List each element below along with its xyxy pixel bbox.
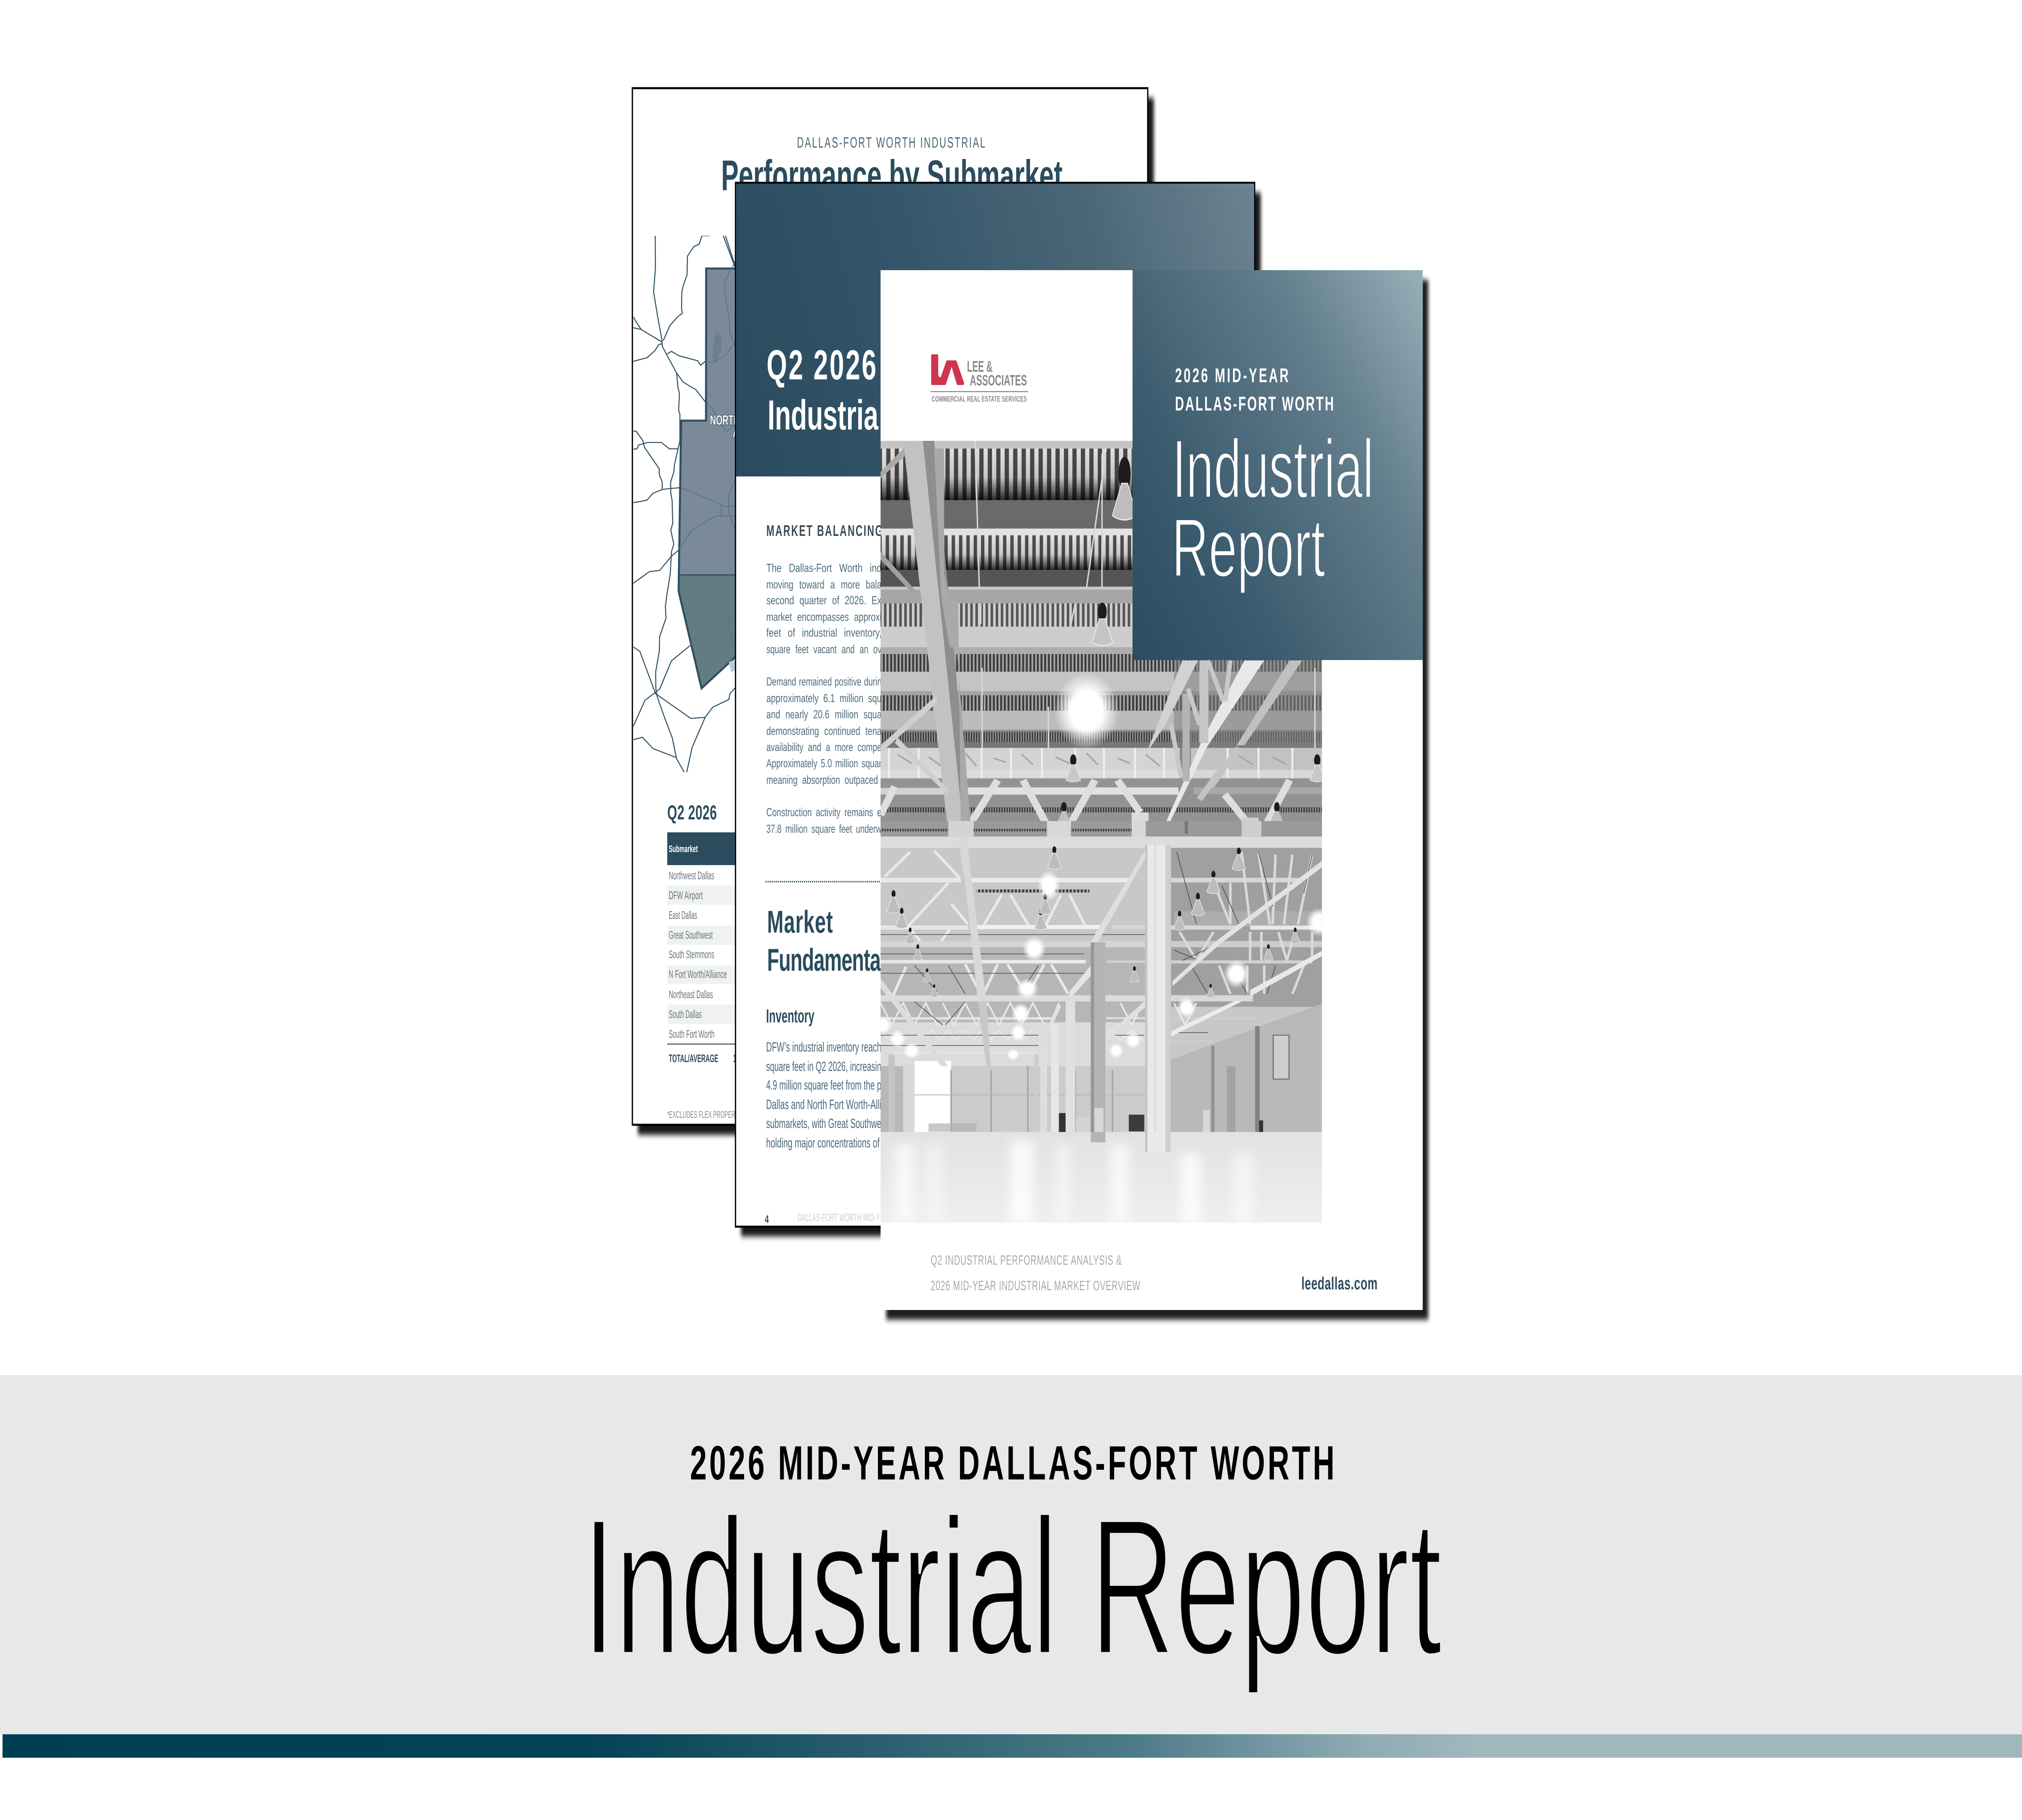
submarket table: Northwest Dallas (669, 869, 714, 882)
page heading: Performance by Submarket (721, 151, 1063, 199)
submarket table: South Fort Worth (669, 1028, 715, 1040)
body text: market overview: and nearly 20.6 million squa (766, 708, 882, 721)
photo: hall, columns and floor (875, 821, 1332, 1225)
photo: ceiling light flares (875, 870, 1332, 1061)
submarket table: N Fort Worth/Alliance (669, 968, 727, 980)
cover title: Industrial (1172, 423, 1374, 515)
page eyebrow: DALLAS-FORT WORTH INDUSTRIAL (797, 134, 985, 151)
photo: hanging lamps (1054, 457, 1324, 823)
band title: Industrial Report (583, 1478, 1442, 1696)
section heading: market fundamentals: Market (767, 904, 833, 940)
photo: polished floor (881, 1132, 1324, 1225)
photo: ceiling (881, 441, 1324, 846)
submarket table: South Stemmons (669, 948, 714, 961)
submarket map (633, 236, 741, 772)
running footer: DALLAS-FORT WORTH MID-Y (797, 1211, 880, 1223)
body text: market overview: 37.8 million square feet underw (766, 823, 882, 836)
body text: market overview: Construction activity remains e (766, 806, 882, 819)
page heading: Industria (768, 392, 878, 439)
table footnote: *EXCLUDES FLEX PROPER (667, 1110, 735, 1120)
body text: inventory: Dallas and North Fort Worth-Alli (766, 1097, 881, 1112)
report cover page (875, 270, 1428, 1320)
body text: market overview: demonstrating continued tena (766, 725, 882, 738)
cover photo: warehouse interior (875, 441, 1332, 1225)
sub-heading: inventory: Inventory (766, 1006, 814, 1027)
photo: roof trusses (881, 821, 1324, 1066)
page heading: Q2 2026 (767, 341, 876, 389)
section heading: market balancing: MARKET BALANCING (766, 522, 882, 539)
section heading: market fundamentals (767, 904, 881, 978)
section heading: market fundamentals: Fundamenta (767, 942, 881, 978)
photo: back and side walls (881, 1003, 1324, 1138)
logo: Lee & Associates: ASSOCIATES (970, 372, 1027, 389)
submarket table: Great Southwest (669, 929, 713, 941)
submarket table (667, 832, 737, 1064)
photo: small hanging lamps (887, 847, 1300, 998)
cover eyebrow: DALLAS-FORT WORTH (1175, 393, 1334, 415)
photo: steel girders (881, 441, 1315, 845)
report page: Q2 2026 industrial market (736, 183, 1261, 1236)
submarket table: Submarket (669, 844, 698, 855)
body text: market overview: second quarter of 2026. Ex (766, 594, 882, 607)
body text: inventory: submarkets, with Great Southwe (766, 1116, 881, 1131)
submarket table: East Dallas (669, 909, 697, 921)
page heading (767, 341, 878, 439)
table title: Q2 2026 (667, 801, 717, 824)
body text: inventory: holding major concentrations of (766, 1135, 880, 1150)
header band (736, 184, 1254, 476)
report page: performance by submarket (632, 88, 1154, 1135)
body text: market overview: The Dallas-Fort Worth ind (766, 562, 882, 575)
photo: columns (888, 845, 1171, 1152)
cover footer description: 2026 MID-YEAR INDUSTRIAL MARKET OVERVIEW (931, 1278, 1140, 1293)
submarket table: DFW Airport (669, 889, 703, 902)
body text: market overview (766, 562, 882, 836)
body text: market overview: square feet vacant and an ov (766, 643, 882, 656)
submarket table: 1 (733, 1052, 737, 1064)
cover footer description (931, 1253, 1140, 1293)
logo block (881, 270, 1133, 441)
cover footer description: Q2 INDUSTRIAL PERFORMANCE ANALYSIS & (931, 1253, 1122, 1268)
body text: market overview: moving toward a more bala (766, 578, 882, 591)
submarket table: Northeast Dallas (669, 988, 713, 1001)
title panel (1133, 270, 1423, 660)
body text: market overview: Demand remained positive durin (766, 675, 882, 688)
gradient rule (2, 1734, 2022, 1758)
logo: Lee & Associates: COMMERCIAL REAL ESTATE SERVICES (932, 395, 1027, 404)
body text: market overview: feet of industrial inventory, (766, 626, 882, 639)
body text: market overview: meaning absorption outpaced (766, 774, 878, 787)
body text: market overview: Approximately 5.0 million squar (766, 757, 882, 770)
body text: market overview: availability and a more compe (766, 741, 882, 754)
submarket table: South Dallas (669, 1008, 702, 1020)
photo: insulated duct (881, 748, 1324, 779)
cover title (1172, 423, 1374, 594)
title band (0, 1375, 2022, 1734)
body text: inventory: DFW’s industrial inventory reach (766, 1039, 881, 1054)
body text: market overview: market encompasses approxi (766, 611, 882, 624)
body text: inventory: square feet in Q2 2026, increasin (766, 1059, 881, 1074)
logo: Lee & Associates: LEE & (967, 358, 992, 375)
cover website: leedallas.com (1301, 1273, 1377, 1293)
logo: Lee & Associates (931, 354, 1028, 404)
body text: inventory (766, 1039, 881, 1150)
cover title: Report (1172, 502, 1325, 594)
map label: NORTH (710, 413, 740, 427)
body text: market overview: approximately 6.1 million squ (766, 692, 882, 705)
body text: inventory: 4.9 million square feet from the p (766, 1077, 881, 1092)
submarket table: TOTAL/AVERAGE (669, 1052, 718, 1064)
cover eyebrow (1175, 364, 1334, 415)
cover eyebrow: 2026 MID-YEAR (1175, 364, 1288, 387)
band eyebrow: 2026 MID-YEAR DALLAS-FORT WORTH (690, 1436, 1335, 1490)
map label fragment: A (733, 427, 738, 440)
page number: 4 (765, 1213, 769, 1225)
